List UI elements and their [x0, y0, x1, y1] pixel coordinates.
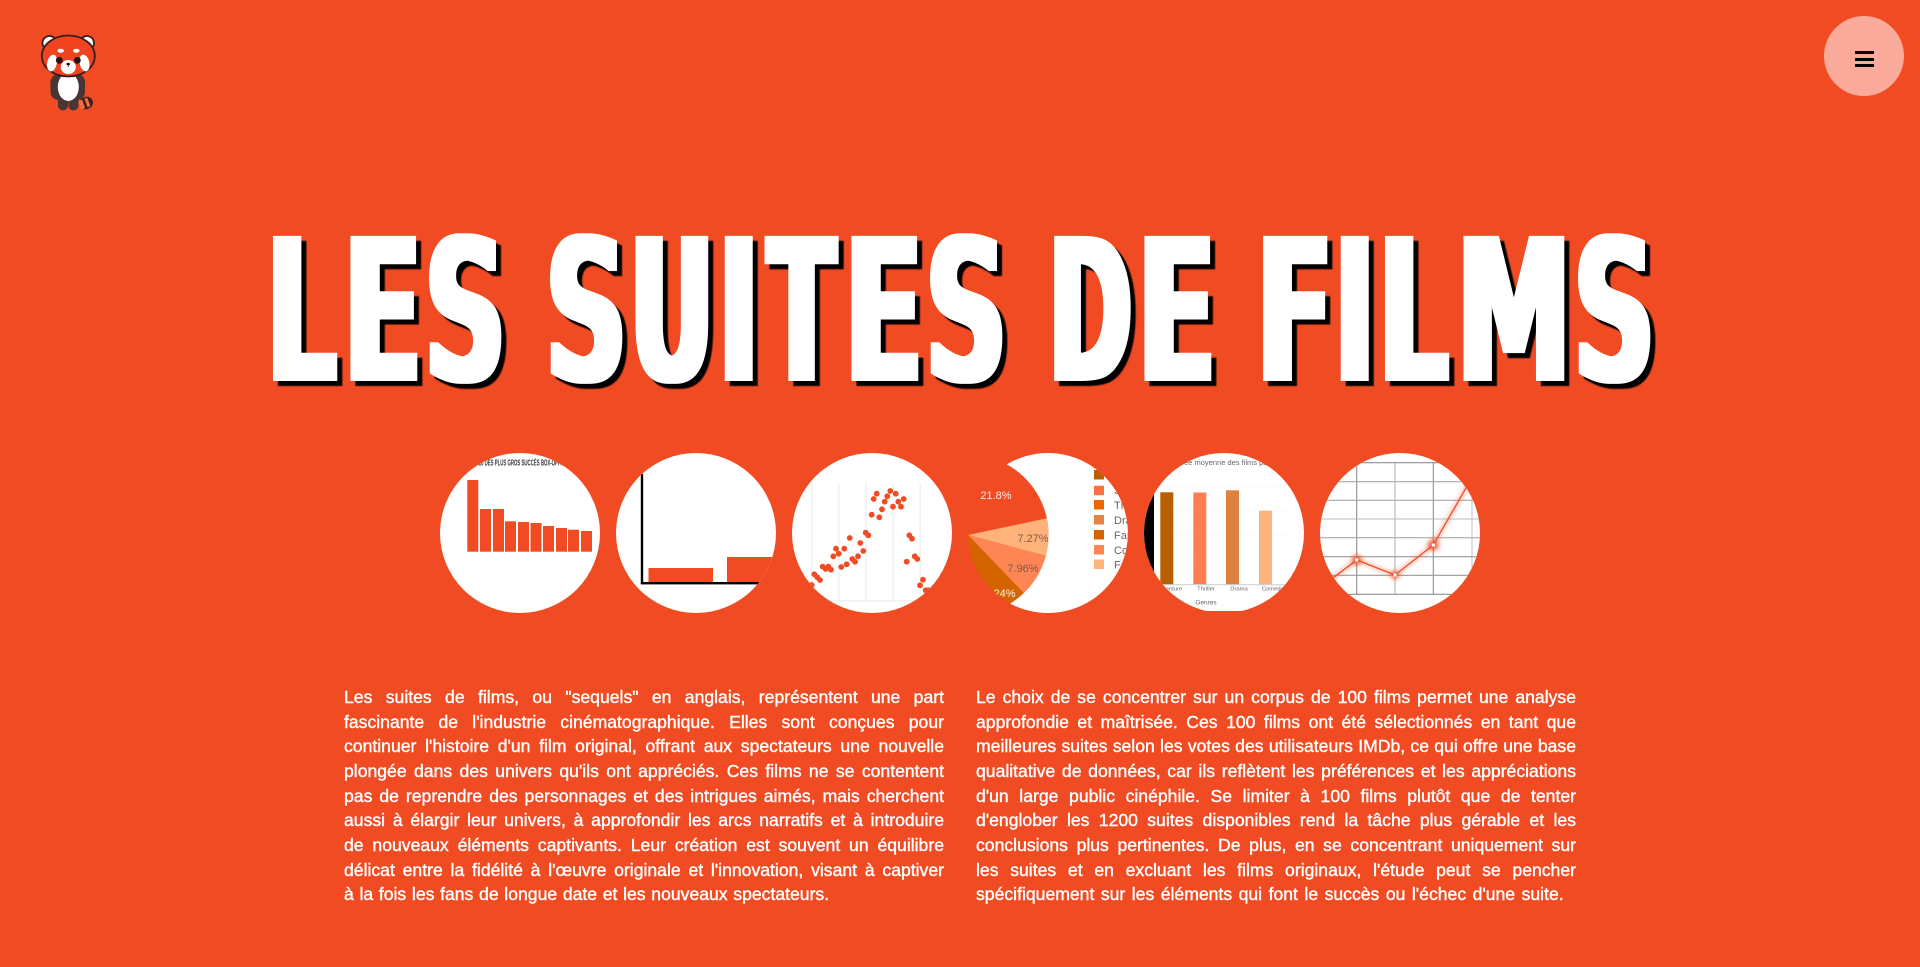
legend: [1094, 470, 1128, 569]
line chart thumbnail: [1320, 453, 1480, 613]
bar chart thumbnail: box-office: TOP 10 DES PLUS GROS SUCCÈS BOX-OFFICE: [469, 458, 568, 468]
ears: [42, 36, 94, 50]
bar chart thumbnail: average duration by genre: Adventure: [1156, 586, 1182, 592]
text block: left column: plongée dans des univers qu'ils ont appréciés. Ces films ne se contentent: [344, 761, 944, 781]
text block: right column: meilleures suites selon les votes des utilisateurs IMDb, ce qui offre une base: [976, 736, 1576, 756]
legs: [58, 95, 78, 110]
cheeks: [46, 49, 91, 74]
text block: right column: conclusions plus pertinentes. De plus, en se concentrant uniquement sur: [976, 835, 1576, 855]
title: I: [719, 196, 759, 428]
menu button: [1824, 16, 1904, 96]
bar chart thumbnail: average duration by genre: Comedy: [1262, 586, 1284, 592]
belly: [58, 73, 79, 101]
tail: [77, 95, 95, 111]
title: D: [1049, 196, 1132, 428]
title: I: [1335, 196, 1374, 428]
title: F: [1257, 196, 1332, 428]
pie chart thumbnail: 7.96%: [1007, 563, 1039, 575]
title: S: [1574, 196, 1654, 428]
face: [56, 57, 81, 67]
text block: left column: à la fois les fans de longue date et les nouveaux spectateurs.: [344, 884, 829, 904]
title: E: [1138, 196, 1215, 428]
pie chart thumbnail: 21.8%: [980, 490, 1012, 502]
title: S: [425, 196, 505, 428]
text block: right column: [976, 687, 1576, 904]
text block: left column: [344, 687, 944, 904]
icon: hamburger: [1855, 51, 1874, 67]
text block: right column: les suites et en excluant les films originaux, l'étude peut se pencher: [976, 860, 1576, 880]
pie chart thumbnail: 7.27%: [1017, 533, 1049, 545]
bar chart thumbnail: average duration by genre: Thriller: [1197, 586, 1215, 592]
title: E: [845, 196, 923, 428]
legend: Fantasy: [1114, 530, 1154, 542]
title: M: [1456, 196, 1570, 428]
text block: left column: de nouveaux éléments captivants. Leur création est souvent un équilibre: [344, 835, 944, 855]
pie chart thumbnail: [968, 453, 1128, 613]
title: L: [267, 196, 336, 428]
title: L: [1379, 196, 1448, 428]
chart thumbnails row: [440, 453, 1480, 613]
text block: left column: aussi à élargir leur univers, à approfondir les arcs narratifs et à introduire: [344, 810, 944, 830]
scatter plot thumbnail: [792, 453, 952, 613]
legend: Sci-Fi: [1114, 485, 1142, 497]
text block: left column: fascinante de l'industrie cinématographique. Elles sont conçues pour: [344, 712, 944, 732]
text block: left column: pas de reprendre des personnages et des intrigues aimés, mais cherchent: [344, 786, 944, 806]
head: [42, 36, 95, 76]
text block: right column: spécifiquement sur les éléments qui font le succès ou l'échec d'une suite.: [976, 884, 1564, 904]
bar chart thumbnail: zoomed axes: [616, 453, 787, 613]
white crescent background: [1007, 453, 1128, 613]
text block: left column: continuer l'histoire d'un film original, offrant aux spectateurs une nouvelle: [344, 736, 944, 756]
title: [267, 196, 1656, 428]
text block: right column: d'englober les 1200 suites disponibles rend la tâche plus gérable et les: [976, 810, 1576, 830]
bar chart thumbnail: average duration by genre: Drama: [1230, 586, 1248, 592]
text block: right column: d'un large public cinéphile. Se limiter à 100 films plutôt que de tenter: [976, 786, 1576, 806]
title: E: [344, 196, 421, 428]
bar chart thumbnail: average duration by genre: Durée moyenne des films par genre: [1172, 458, 1291, 467]
title: U: [630, 196, 714, 428]
text block: left column: Les suites de films, ou "sequels" en anglais, représentent une part: [344, 687, 944, 707]
title: T: [768, 196, 835, 428]
text block: left column: délicat entre la fidélité à l'œuvre originale et l'innovation, visant à captiver: [344, 860, 944, 880]
bar chart thumbnail: average duration by genre: Genres: [1195, 600, 1217, 606]
text block: right column: qualitative de données, car ils reflètent les préférences et les appréciations: [976, 761, 1576, 781]
arms and body: [50, 74, 85, 100]
bar chart thumbnail: box-office: [440, 453, 600, 613]
legend: Comedy: [1114, 545, 1155, 557]
title: S: [926, 196, 1006, 428]
legend: Family: [1114, 560, 1147, 572]
title: S: [546, 196, 626, 428]
legend: Thriller: [1114, 500, 1148, 512]
logo: red panda mascot: [40, 34, 96, 110]
pie chart thumbnail: 8.24%: [984, 588, 1016, 600]
text block: right column: approfondie et maîtrisée. Ces 100 films ont été sélectionnés en tant que: [976, 712, 1576, 732]
bar chart thumbnail: average duration by genre: [1144, 453, 1304, 611]
legend: Drame: [1114, 515, 1147, 527]
text block: right column: Le choix de se concentrer sur un corpus de 100 films permet une analyse: [976, 687, 1576, 707]
